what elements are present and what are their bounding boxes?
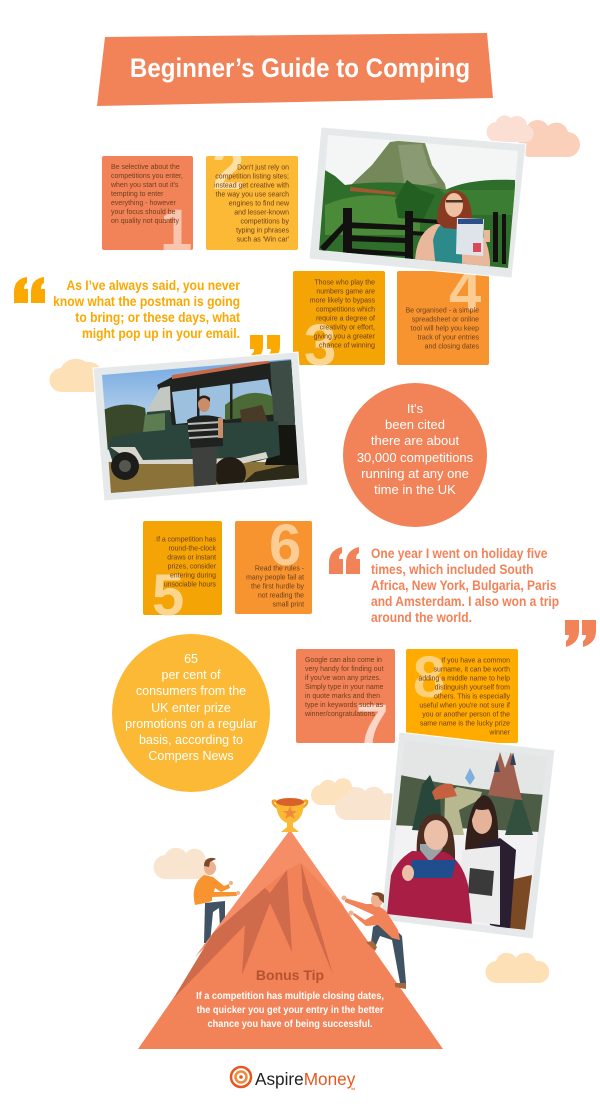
card 7 text: type in keywords such as [305,700,383,709]
card 3 text: chance of winning [319,340,375,350]
photo 2: man with safari jeep [93,352,308,501]
card 5 [143,521,222,628]
card 3 text: require a degree of [316,313,376,323]
card 8 text: If you have a common [441,655,510,665]
card 2 text: instead get creative with [214,180,289,190]
stat circle: 65 per cent: UK enter prize [151,700,231,715]
stat circle: 65 per cent [112,634,270,792]
card 6 text: small print [273,599,304,609]
card 3 text: Those who play the [314,277,375,287]
card 6 text: not reading the [258,590,304,600]
cloud: centre small [311,778,362,805]
card 4 text: tool will help you keep [411,323,479,333]
left climber [194,858,240,953]
quote mark: close coral [565,620,596,647]
card 6 text: many people fail at [246,572,304,582]
bonus tip heading: Bonus Tip [256,967,324,983]
card 1 text: when you start out it's [110,180,179,189]
card 5 text: draws or instant [167,552,216,562]
card 8 text: you or another person of the [422,709,510,719]
card 5 text: unsociable hours [164,579,216,589]
card 7 text: Google can also come in [305,655,382,664]
stat circle: 65 per cent: per cent of [162,667,221,682]
cloud: top right light [486,115,534,142]
card 7 text: Simply type in your name [305,682,383,691]
quote 1 text: know what the postman is going [53,293,240,309]
card 2 text: Don't just rely on [237,162,289,172]
bonus tip text: If a competition has multiple closing dates, [196,991,384,1002]
stat circle: 30,000 competitions: been cited [385,417,445,432]
photo 1: woman with magazine at mountain [309,127,526,278]
logo: AspireMoney [231,1067,356,1091]
title banner [97,33,493,106]
number 5: 5 [152,563,184,628]
number 4: 4 [449,258,481,323]
quote 2 text: Africa, New York, Bulgaria, Paris [371,577,556,593]
card 1 text: your focus should be [111,207,175,216]
bonus tip text: chance you have of being successful. [208,1019,372,1030]
card 4 text: spreadsheet or online [412,314,479,324]
photo 3: two girls at castle [381,732,555,939]
card 8 [406,645,518,743]
logo: AspireMoney: AspireMoney [255,1069,356,1089]
logo: AspireMoney: ltd [351,1086,355,1091]
cloud: centre large [335,787,403,820]
card 7 text: if you've won any prizes. [305,673,381,682]
card 1 text: on quality not quantity [111,216,179,225]
card 7 text: in quote marks and then [305,691,380,700]
quote mark: open coral [329,547,360,574]
quote 2 text: around the world. [371,609,472,625]
card 6 text: Read the rules - [255,563,305,573]
bonus tip text: the quicker you get your entry in the better [197,1005,384,1016]
quote 1 text: to bring; or these days, what [75,309,241,325]
card 4 [397,258,489,365]
right climber [342,892,406,989]
quote mark: close orange [250,335,280,361]
stat circle: 30,000 competitions: there are about [371,433,459,448]
card 2 text: engines to find new [229,198,290,208]
card 6 [235,513,312,614]
cloud: bottom right [485,953,549,983]
card 2 [206,156,298,250]
card 5 text: If a competition has [156,534,216,544]
card 1 text: competitions you enter, [111,171,183,180]
card 5 text: round-the-clock [168,543,216,553]
card 8 text: distinguish yourself from [435,682,510,692]
card 2 text: typing in phrases [236,225,289,235]
card 2 text: the way you use search [216,189,289,199]
card 3 text: numbers game are [316,286,375,296]
icon: trophy [273,798,307,832]
card 4 text: Be organised - a simple [406,305,479,315]
card 1 text: tempting to enter [111,189,164,198]
card 3 text: giving you a greater [314,331,376,341]
card 2 text: competition listing sites; [215,171,289,181]
card 3 text: more likely to bypass [310,295,375,305]
number 7: 7 [356,693,388,758]
card 8 text: useful when you're not sure if [419,700,511,710]
card 1 text: Be selective about the [111,162,180,171]
card 7 text: very handy for finding out [305,664,383,673]
cloud: left peach [49,359,102,392]
stat circle: 65 per cent: consumers from the [136,683,246,698]
number 3: 3 [304,313,336,378]
card 8 text: others. This is especially [434,691,510,701]
quote 1 text: might pop up in your email. [82,325,240,341]
card 5 text: entering during [170,570,216,580]
card 8 text: same name is the lucky prize [420,718,510,728]
stat circle: 65 per cent: Compers News [148,748,234,763]
card 2 text: competitions by [240,216,289,226]
quote 2 text: times, which included South [371,561,533,577]
quote mark: open orange [14,277,45,303]
stat circle: 30,000 competitions: time in the UK [374,482,456,497]
stat circle: 30,000 competitions: It's [407,401,424,416]
card 6 text: the first hurdle by [251,581,304,591]
card 2 text: such as 'Win car' [237,234,290,244]
card 7 text: winner/congratulations [304,709,375,718]
card 1 text: everything - however [111,198,176,207]
number 2: 2 [212,137,244,202]
quote 2 text: One year I went on holiday five [371,545,548,561]
stat circle: 65 per cent: 65 [184,651,198,666]
card 8 text: adding a middle name to help [418,673,510,683]
cloud: top right pink [519,120,580,157]
card 1 [102,156,193,250]
stat circle: 30,000 competitions: running at any one [361,466,469,481]
card 8 text: winner [488,727,511,737]
card 3 text: creativity or effort, [320,322,375,332]
card 4 text: and closing dates [425,341,479,351]
number 1: 1 [160,198,192,263]
quote 1 text: As I’ve always said, you never [66,277,240,293]
number 6: 6 [269,513,301,578]
card 2 text: and lesser-known [234,207,289,217]
title banner: Beginner’s Guide to Comping [130,54,470,83]
card 7 [296,649,395,743]
stat circle: 65 per cent: promotions on a regular [125,716,258,731]
card 3 text: competitions which [316,304,375,314]
card 5 text: prizes, consider [168,561,217,571]
card 8 text: surname, it can be worth [433,664,510,674]
number 8: 8 [413,645,445,710]
cloud: left of mountain [154,848,210,879]
stat circle: 30,000 competitions [343,383,487,527]
card 3 [293,271,385,378]
mountain with bonus tip [138,830,443,1049]
quote 2 text: and Amsterdam. I also won a trip [371,593,559,609]
card 4 text: track of your entries [418,332,479,342]
stat circle: 30,000 competitions: 30,000 competitions [357,450,474,465]
stat circle: 65 per cent: basis, according to [139,732,243,747]
